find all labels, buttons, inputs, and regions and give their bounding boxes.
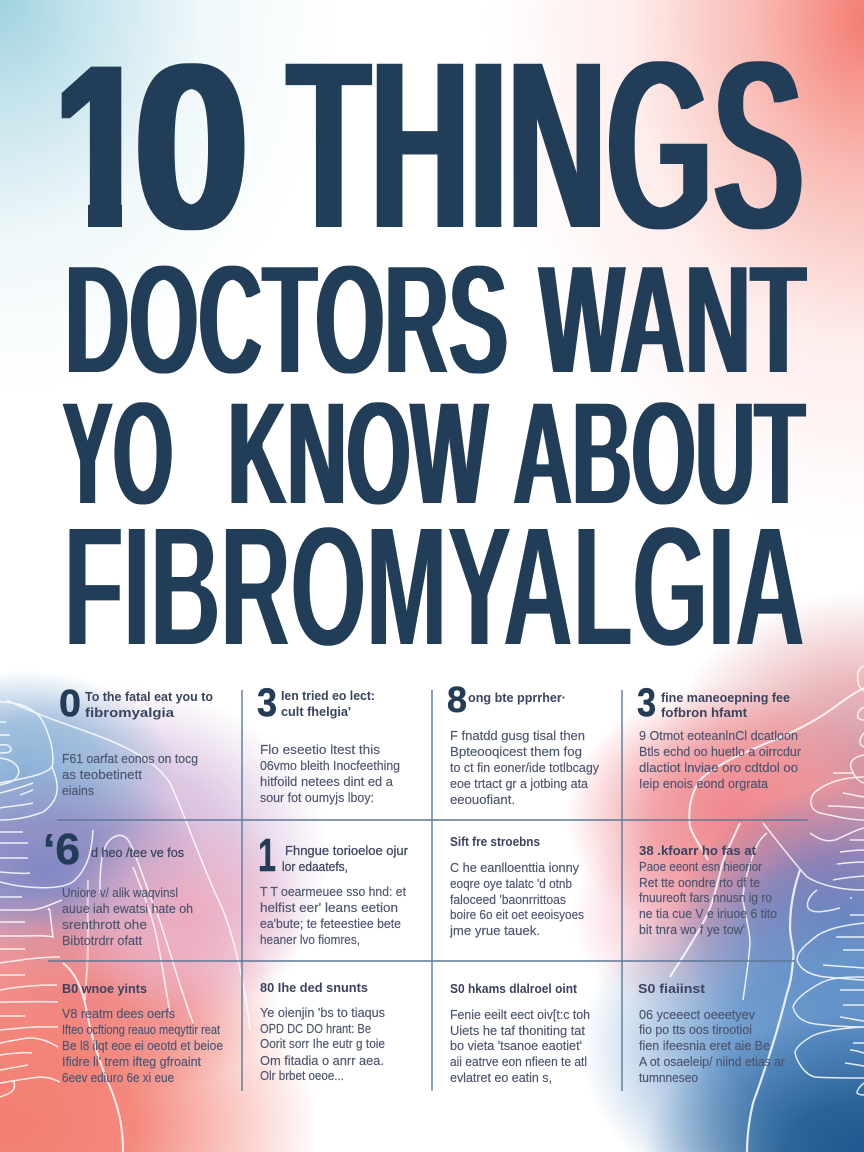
body text: eoqre oye talatc 'd otnb <box>450 877 572 891</box>
title line 1: 10 THINGS: 1 <box>54 16 149 280</box>
body text <box>260 743 400 805</box>
body text: eiains <box>62 784 94 798</box>
heading <box>85 689 213 720</box>
body text <box>62 886 193 948</box>
body text: Uniore v/ alik waqvinsl <box>62 886 178 900</box>
body text: Bibtotrdrr ofatt <box>62 934 143 948</box>
body text: to ct fin eoner/ide totlbcagy <box>450 761 600 775</box>
panel: item 7 <box>449 834 584 938</box>
panel: item 1 <box>59 683 213 798</box>
heading: d heo /tee ve fos <box>91 845 184 860</box>
heading: lor edaatefs, <box>282 859 348 874</box>
numeral: 1 <box>258 829 276 881</box>
title <box>62 61 808 646</box>
heading: fibromyalgia <box>85 705 175 720</box>
title line 1: 10 THINGS <box>62 61 802 230</box>
body text <box>450 1008 590 1085</box>
body text: Ret tte oondre rto df te <box>639 876 760 890</box>
body text: dlactiot lnviae oro cdtdol oo <box>639 761 798 775</box>
body text: Btls echd oo huetlo a oirrcdur <box>639 745 801 759</box>
heading <box>281 688 375 719</box>
heading: cult fhelgia' <box>281 704 351 719</box>
panel: item 8 <box>639 843 777 937</box>
body text: Ye oienjin 'bs to tiaqus <box>260 1006 385 1020</box>
body text <box>260 885 407 947</box>
body text: ne tia cue V e iriuoe 6 tito <box>639 907 777 921</box>
body text: jme yrue tauek. <box>449 924 540 938</box>
body text: Uiets he taf thoniting tat <box>450 1024 586 1038</box>
panel: item 6 <box>258 829 409 947</box>
heading: ong bte pprrher· <box>468 690 566 705</box>
heading: fine maneoepning fee <box>661 690 790 705</box>
body text: tumnneseo <box>639 1071 698 1085</box>
numeral: 3 <box>637 681 656 725</box>
title line 3: YO KNOW ABOUT: KNOW <box>228 369 488 537</box>
body text: srenthrott ohe <box>62 918 147 932</box>
heading: Ien tried eo lect: <box>281 688 375 703</box>
title line 2: DOCTORS WANT: DOCTORS <box>65 232 508 408</box>
body text: hitfoild netees dint ed a <box>260 775 393 789</box>
panel: item 10 <box>260 980 385 1083</box>
heading: Sift fre stroebns <box>450 834 540 849</box>
heading: Fhngue torioeloe ojur <box>285 843 409 858</box>
body text: Be l8 ilqt eoe ei oeotd et beioe <box>62 1039 223 1053</box>
heading <box>661 690 790 720</box>
body text: Paoe eeont esn hieorior <box>639 860 762 874</box>
body text: heaner lvo fiomres, <box>260 933 360 947</box>
panel: item 5 <box>43 825 193 948</box>
body text <box>449 861 584 938</box>
body text: V8 reatm dees oerfs <box>62 1007 175 1021</box>
body text: Ieip enois eond orgrata <box>639 777 768 791</box>
numeral: 8 <box>447 679 467 720</box>
body text <box>62 752 198 798</box>
heading: 80 Ihe ded snunts <box>260 980 368 995</box>
body text: Oorit sorr Ihe eutr g toie <box>260 1037 385 1051</box>
grid lines <box>48 690 808 1091</box>
heading: S0 fiaiinst <box>638 981 706 996</box>
body text: 06vmo bleith Inocfeething <box>260 759 400 773</box>
heading: B0 wnoe yints <box>62 981 147 996</box>
numeral: 3 <box>257 681 277 725</box>
panel: item 4 <box>637 681 801 791</box>
heading: To the fatal eat you to <box>85 689 213 704</box>
body text: F61 oarfat eonos on tocg <box>62 752 198 766</box>
body text: aii eatrve eon nfieen te atl <box>450 1055 587 1069</box>
body text: ea'bute; te feteestiee bete <box>260 917 401 931</box>
body text <box>639 729 801 791</box>
body text: T T oearmeuee sso hnd: et <box>260 885 407 899</box>
body text: faloceed 'baonrrittoas <box>450 893 566 907</box>
body text: eeouofiant. <box>450 793 515 807</box>
heading: 38 .kfoarr ho fas at <box>639 843 757 858</box>
body text: 6eev ediuro 6e xi eue <box>62 1071 174 1085</box>
body text: as teobetinett <box>62 768 143 782</box>
panel: item 11 <box>450 981 590 1085</box>
body text <box>260 1006 385 1083</box>
body text: fien ifeesnia eret aie Be <box>639 1039 770 1053</box>
body text: OPD DC DO hrant: Be <box>260 1022 371 1036</box>
title line 3: YO KNOW ABOUT <box>62 369 805 537</box>
body text <box>639 1008 785 1085</box>
body text: bo vieta 'tsanoe eaotiet' <box>450 1039 582 1053</box>
body outline illustration: left <box>0 700 250 1152</box>
body text <box>450 729 600 807</box>
body text: 9 Otmot eoteanlnCl dcatloon <box>639 729 798 743</box>
panel: item 9 <box>62 981 223 1085</box>
body text: bit tnra wo f ye tow' <box>639 923 745 937</box>
heading <box>282 843 409 874</box>
body text: Ifidre li' trem ifteg gfroaint <box>62 1055 202 1069</box>
title line 3: YO KNOW ABOUT: YO <box>62 369 173 537</box>
panel: item 12 <box>638 981 785 1085</box>
body outline illustration: right <box>670 666 864 1152</box>
numeral: 0 <box>59 683 81 725</box>
body text: fnuureoft fars nnusn ig ro <box>639 891 772 905</box>
body text: 06 yceeect oeeetyev <box>639 1008 756 1022</box>
title line 1: 10 THINGS: 0 <box>134 15 249 279</box>
body text: Bpteooqicest them fog <box>450 745 582 759</box>
body text: Ifteo ocftiong reauo meqyttir reat <box>62 1023 220 1037</box>
heading: S0 hkams dlalroel oint <box>450 981 578 996</box>
body text: evlatret eo eatin s, <box>450 1071 552 1085</box>
body text <box>62 1007 223 1085</box>
body text: Flo eseetio ltest this <box>260 743 380 757</box>
body text: C he eanlloenttia ionny <box>450 861 580 875</box>
body text: Fenie eeilt eect oiv[t:c toh <box>450 1008 590 1022</box>
body text: A ot osaeleip/ niind etias ar <box>639 1055 785 1069</box>
body text: sour fot oumyjs lboy: <box>260 791 374 805</box>
body text: Olr brbet oeoe... <box>260 1069 344 1083</box>
numeral: ‘6 <box>43 825 80 874</box>
body text: auue iah ewatsi hate oh <box>62 902 193 916</box>
body text: Om fitadia o anrr aea. <box>260 1054 384 1068</box>
panel: item 2 <box>257 681 400 805</box>
body text <box>639 860 777 937</box>
body text: F fnatdd gusg tisal then <box>450 729 585 743</box>
body text: eoe trtact gr a jotbing ata <box>450 777 588 791</box>
panel: item 3 <box>447 679 600 807</box>
body text: fio po tts oos tirootioi <box>639 1023 752 1037</box>
body text: helfist eer' leans eetion <box>260 901 398 915</box>
heading: fofbron hfamt <box>661 705 748 720</box>
body text: boire 6o eit oet eeoisyoes <box>450 908 584 922</box>
